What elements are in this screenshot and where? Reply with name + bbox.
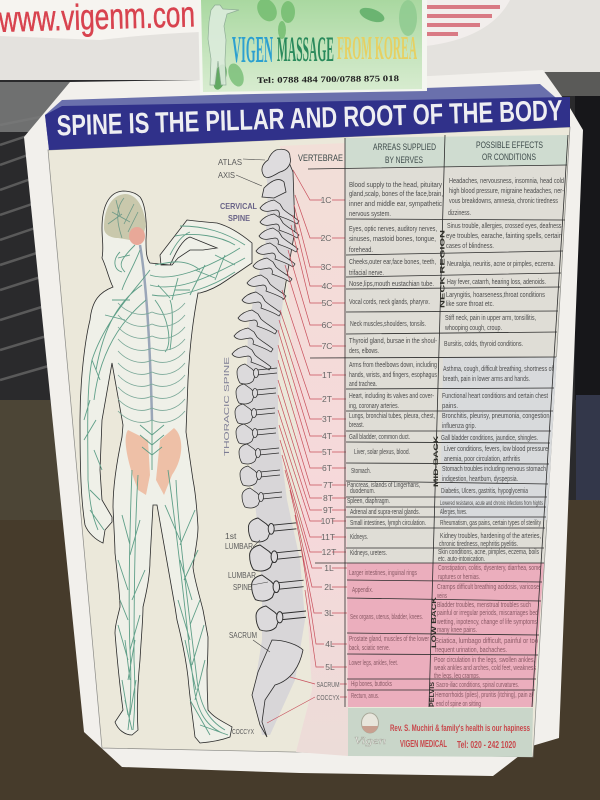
atlas and axis (262, 149, 291, 177)
pink table text: veins (437, 593, 447, 600)
pink table text (349, 565, 541, 708)
icon: leaves (211, 0, 417, 91)
areas supplied by nerves column: duodenum. (350, 488, 375, 495)
possible effects column: Functional heart conditions and certain chest (442, 393, 548, 400)
cerebellum (129, 227, 145, 245)
pink table text: back, sciatic nerve. (349, 645, 390, 652)
cervical vertebrae (253, 200, 299, 282)
vertebrae labels: 9T (323, 505, 333, 515)
pink table text: Hip bones, buttocks (351, 681, 392, 688)
areas supplied by nerves column: Nose,lips,mouth eustachian tube. (349, 281, 434, 288)
possible effects column: dizziness. (448, 210, 471, 217)
areas supplied by nerves column (347, 182, 443, 557)
possible effects column: Rheumatism, gas pains, certain types of sterility (440, 520, 541, 527)
footer slogan: Rev. S. Muchiri & family's health is our hapiness (390, 723, 530, 733)
possible effects column: Lowered resistance, acute and chronic infections from hights (440, 501, 543, 507)
areas supplied by nerves column: Stomach. (351, 468, 371, 475)
spine labels (218, 157, 270, 736)
sticker phone: Tel: 0788 484 700/0788 875 018 (257, 73, 399, 85)
spine front edge (283, 160, 295, 300)
vertebrae labels: 5T (322, 447, 332, 457)
brain veins (108, 198, 138, 238)
areas supplied by nerves column: Cheeks,outer ear,face bones, teeth, (349, 259, 436, 266)
vertebrae labels: 1L (324, 563, 334, 573)
possible effects column: Neuralgia, neuritis, acne or pimples, eczema. (447, 261, 555, 268)
vertebrae labels: 1T (322, 370, 332, 380)
logo (354, 713, 386, 747)
chart sheet (48, 127, 570, 757)
spine labels: SACRUM (229, 630, 257, 640)
pink table text: the legs, leg cramps. (434, 673, 480, 680)
nerves (84, 226, 245, 735)
possible effects column: Kidney troubles, hardening of the arteries, (440, 533, 541, 540)
possible effects column: vous breakdowns, amnesia, chronic tiredness (449, 198, 558, 205)
flag emblem (426, 0, 510, 46)
vertebrae labels: SACRUM (316, 682, 340, 689)
region labels: LOW BACK (431, 597, 438, 648)
pelvis (126, 428, 181, 495)
table grid (308, 135, 568, 707)
vertebrae labels: 1C (321, 195, 331, 205)
pink table text: Sacro-iliac conditions, spinal curvatures. (436, 682, 519, 689)
possible effects column: whooping cough, croup. (444, 325, 502, 332)
possible effects column: chronic tiredness, nephritis pyelitis. (439, 541, 518, 548)
possible effects column: etc. auto-intoxication. (438, 556, 485, 563)
vertebrae labels: 11T (321, 532, 335, 542)
pink table text: Rectum, anus. (351, 693, 379, 700)
possible effects column: pains. (442, 403, 458, 410)
pink table text: wetting, inpotency, change of life symptoms (436, 619, 537, 626)
possible effects column: Stiff neck, pain in upper arm, tonsillitis, (445, 315, 536, 322)
areas supplied by nerves column: breast. (349, 422, 364, 429)
possible effects column: breath, pain in lower arms and hands. (443, 376, 530, 383)
possible effects column: Asthma, cough, difficult breathing, shortness of (443, 366, 553, 373)
areas supplied by nerves column: Eyes, optic nerves, auditory nerves, (349, 226, 437, 233)
possible effects column: Laryngitis, hoarseness,throat conditions (446, 292, 545, 299)
areas supplied by nerves column: Small intestines, lymph circulation. (350, 520, 426, 527)
areas supplied by nerves column: Heart, including its valves and cover- (349, 393, 434, 400)
vertebrae labels: 2L (324, 582, 334, 592)
region labels: NECK REGION (440, 229, 446, 308)
vertebrae labels: COCCYX (316, 695, 340, 702)
table fills (345, 135, 568, 757)
vertebrae labels: 12T (322, 547, 336, 557)
areas supplied by nerves column: trifacial nerve. (349, 270, 384, 277)
spine labels: LUMBAR (228, 570, 256, 580)
pink table text: Constipation, colitis, dysentery, diarrhea, some (438, 565, 541, 572)
vertebrae labels: 4C (322, 281, 332, 291)
spine labels: ATLAS (218, 157, 242, 167)
vertebrae labels: 5C (322, 298, 332, 308)
body outline (80, 191, 252, 743)
table headers: OR CONDITIONS (482, 152, 536, 162)
areas supplied by nerves column: Neck muscles,shoulders, tonsils. (350, 321, 426, 328)
possible effects column: high blood pressure, migraine headaches, ner- (449, 188, 565, 195)
lumbar vertebrae (248, 518, 306, 631)
spine labels: THORACIC SPINE (224, 356, 231, 456)
pink table text: weak ankles and arches, cold feet, weakness (433, 665, 536, 672)
areas supplied by nerves column: Arms from theelbows down, including (349, 362, 437, 369)
areas supplied by nerves column: Blood supply to the head, pituitary (349, 182, 442, 189)
spine labels: CERVICAL (220, 201, 257, 211)
pink nerve zone (280, 143, 348, 756)
possible effects column: indigestion, heartburn, dyspepsia. (442, 476, 518, 483)
possible effects column: Diabetis, Ulcers, gastritis, hypoglycemia (441, 488, 528, 495)
possible effects column: Allergies, hives. (440, 509, 467, 516)
table headers (298, 140, 543, 165)
logo: Vigen (354, 736, 386, 747)
vertebrae labels: 10T (321, 516, 335, 526)
ribs (118, 303, 185, 422)
areas supplied by nerves column: Kidneys. (350, 534, 368, 541)
vertebrae labels: 4T (322, 431, 332, 441)
vertebrae labels: 2T (322, 394, 332, 404)
areas supplied by nerves column: Thyroid gland, bursae in the shoul- (349, 338, 438, 345)
areas supplied by nerves column: Pancreas, islands of Lingerhans, (347, 482, 420, 489)
sticker headline: VIGEN (232, 29, 273, 71)
vertebrae labels: 3T (322, 414, 332, 424)
areas supplied by nerves column: gland,scalp, bones of the face,brain, (349, 191, 443, 198)
spine labels: AXIS (218, 170, 235, 180)
possible effects column: anemia, poor circulation, arthritis (444, 456, 520, 463)
table headers: VERTEBRAE (298, 153, 343, 163)
footer company: VIGEN MEDICAL (400, 739, 447, 750)
possible effects column: Bursitis, colds, thyroid conditions. (444, 341, 523, 348)
areas supplied by nerves column: Liver, solar plexus, blood. (354, 449, 410, 456)
areas supplied by nerves column: hands, wrists, and fingers, esophagus (349, 372, 437, 379)
vertebrae labels: 6T (322, 463, 332, 473)
spine labels: COCCYX (232, 729, 254, 736)
spine labels: SPINE (228, 213, 250, 223)
pink table text: Poor circulation in the legs, swollen ankles, (434, 657, 535, 664)
areas supplied by nerves column: forehead. (349, 247, 373, 254)
areas supplied by nerves column: sinuses, mastoid bones, tongue, (349, 236, 436, 243)
vertebrae labels (316, 195, 340, 702)
spine labels: LUMBAR (225, 541, 253, 551)
sacrum and coccyx (252, 640, 303, 737)
areas supplied by nerves column: ing, coronary arteries. (349, 403, 399, 410)
pink table text: Sex organs, uterus, bladder, knees. (350, 614, 423, 621)
possible effects column: Skin conditions, acne, pimples, eczema, boils (438, 549, 539, 556)
possible effects column: Sinus trouble, allergies, crossed eyes, deafness, (447, 223, 563, 230)
areas supplied by nerves column: Adrenal and supra-renal glands. (350, 509, 420, 516)
pink table text: Appendix. (352, 587, 373, 594)
pink table text: Prostate gland, muscles of the lower (349, 636, 429, 643)
region labels: PELVIS (429, 681, 436, 707)
pink table text: Bladder troubles, menstrual troubles such (437, 602, 531, 609)
pink table text: end of spine on sitting (436, 701, 481, 708)
body figure (80, 191, 252, 743)
possible effects column: Liver conditions, fevers, low blood pressure (444, 446, 548, 453)
pink table text: frequent urination, bachaches. (435, 647, 507, 654)
possible effects column (438, 178, 565, 563)
table headers: BY NERVES (385, 155, 423, 165)
vertebrae labels: 4L (325, 639, 335, 649)
spine illustration (232, 149, 306, 737)
pink table text: Sciatica, lumbago difficult, painful or too (435, 638, 538, 645)
possible effects column: Headaches, nervousness, insomnia, head cold (449, 178, 564, 185)
spine labels: 1st (225, 531, 237, 541)
vertebrae labels: 8T (323, 493, 333, 503)
areas supplied by nerves column: Vocal cords, neck glands, pharynx. (349, 299, 430, 306)
pink table text: painful or irregular periods, miscarriages bed (437, 610, 538, 617)
thoracic vertebrae (232, 275, 286, 508)
areas supplied by nerves column: ders, elbows. (349, 348, 379, 355)
pink table text: Cramps difficult breathing acidosis, varicose (437, 584, 539, 591)
brain (104, 194, 146, 240)
areas supplied by nerves column: nervous system. (349, 211, 391, 218)
possible effects column: cases of blindness. (446, 243, 494, 250)
areas supplied by nerves column: Kidneys, ureters. (350, 550, 387, 557)
possible effects column: Bronchitis, pleurisy, pneumonia, congestion, (442, 413, 551, 420)
vertebrae labels: 6C (322, 320, 332, 330)
table headers: ARREAS SUPPLIED (373, 142, 436, 152)
spine fill (246, 152, 305, 735)
pink table text: many knee pains. (437, 627, 477, 634)
areas supplied by nerves column: and trachea. (349, 381, 377, 388)
areas supplied by nerves column: Lungs, bronchial tubes, pleura, chest, (349, 413, 435, 420)
spine labels: SPINE (233, 582, 252, 592)
possible effects column: Hay fever, catarrh, hearing loss, adenoids. (447, 279, 546, 286)
footer phone: Tel: 020 - 242 1020 (457, 740, 516, 751)
icon: body figure (208, 5, 239, 85)
text: FROM KOREA (337, 30, 417, 67)
areas supplied by nerves column: Gall bladder, common duct. (349, 434, 410, 441)
areas supplied by nerves column: Spleen, diaphragm. (347, 498, 390, 505)
region labels (429, 229, 446, 707)
vertebrae labels: 7C (322, 341, 332, 351)
massage sticker (198, 0, 427, 95)
possible effects column: like sore throat etc. (446, 301, 494, 308)
red nerve lines (267, 170, 347, 723)
pink table text: ruptures or hernias. (438, 574, 480, 581)
vertebrae labels: 3C (321, 262, 331, 272)
vertebrae labels: 7T (323, 480, 333, 490)
pink table text: Lower legs, ankles, feet. (349, 660, 398, 667)
areas supplied by nerves column: inner and middle ear, sympathetic (349, 201, 442, 208)
possible effects column: Gall bladder conditions, jaundice, shingles. (441, 435, 538, 442)
pink table text: Hemorrhoids (piles), pruritis (itching), pain at (435, 692, 533, 699)
sticker headline (232, 29, 417, 71)
possible effects column: eye troubles, earache, fainting spells, certain (446, 233, 562, 240)
vertebrae labels: 2C (321, 233, 331, 243)
possible effects column: influenza grip. (442, 423, 476, 430)
table headers: POSSIBLE EFFECTS (476, 140, 543, 150)
vertebrae labels: 3L (324, 608, 334, 618)
footer (354, 713, 530, 751)
sticker headline: MASSAGE (277, 29, 334, 69)
vertebrae labels: 5L (325, 662, 335, 672)
region labels: MID-BACK (433, 436, 440, 487)
pink table text: Larger intestines, inguinal rings (349, 570, 417, 577)
spinal cord (140, 245, 152, 420)
possible effects column: Stomach troubles including nervous stomach (442, 466, 546, 473)
